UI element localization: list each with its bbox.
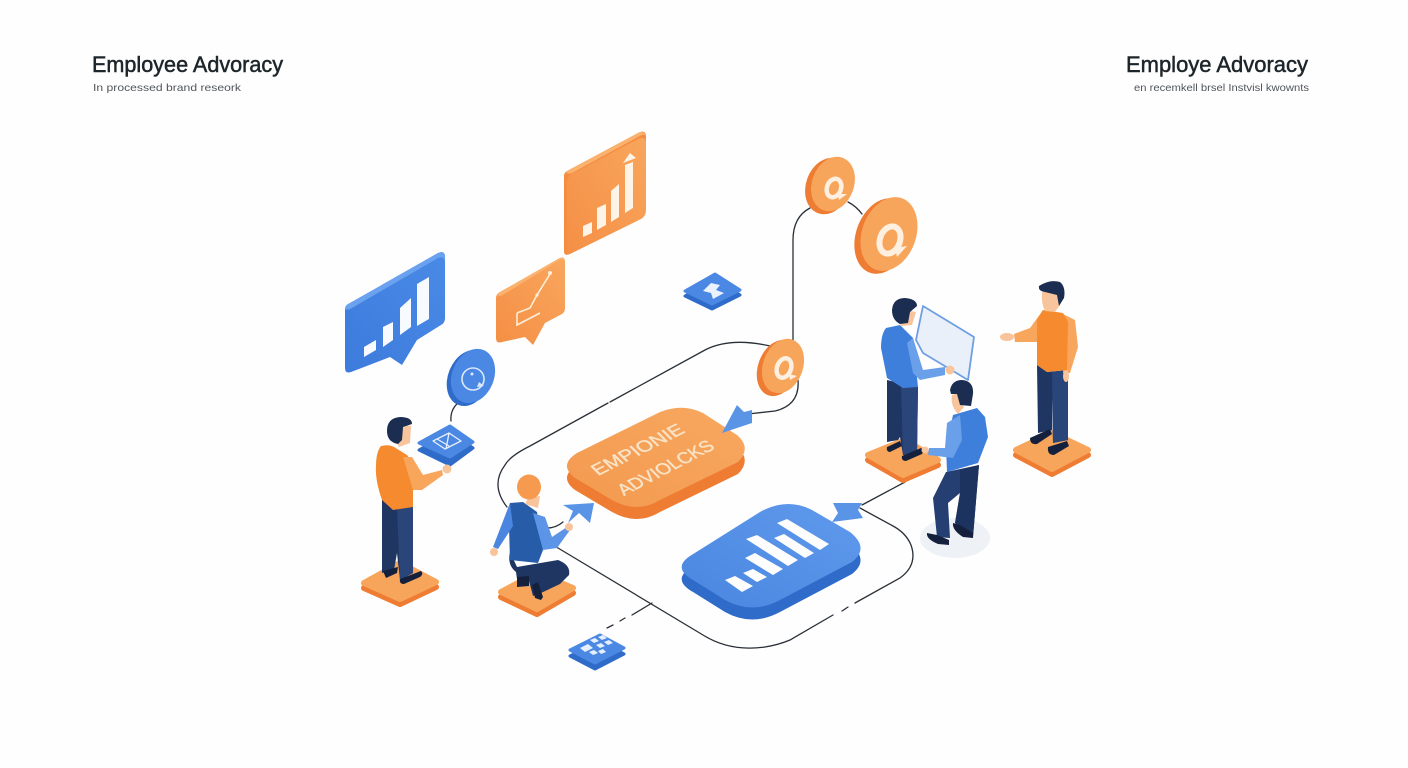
person: kneeling, blue xyxy=(490,474,573,600)
icon: orange chat circle 2 xyxy=(844,189,927,282)
icon: blue tile grid xyxy=(570,635,624,669)
arrow: from sitting person xyxy=(563,503,594,523)
title block: right: Employe Advoracy xyxy=(1126,52,1308,77)
platform: right figure xyxy=(1016,433,1088,474)
pants xyxy=(382,500,413,580)
pants xyxy=(887,380,918,455)
shirt xyxy=(1037,310,1068,372)
shirt xyxy=(946,408,988,472)
title block: left: Employee Advoracy xyxy=(92,52,283,77)
icon: blue circle badge xyxy=(439,342,503,413)
person: right standing, orange xyxy=(1000,281,1078,455)
head xyxy=(952,393,964,414)
slab label xyxy=(587,421,719,499)
panel: blue slab xyxy=(682,504,861,620)
person: left standing, orange xyxy=(376,417,452,584)
arm xyxy=(403,457,443,490)
title block: left: In processed brand reseork xyxy=(93,82,242,94)
icon: big orange chart card xyxy=(564,132,646,255)
shirt xyxy=(881,325,918,388)
platform: centre figure xyxy=(868,440,938,480)
icon: small orange chart bubble xyxy=(496,258,565,345)
platform: kneeling figure xyxy=(501,573,573,614)
icon: blue chart bubble xyxy=(345,252,445,372)
pants xyxy=(933,465,979,538)
title block: right: en recemkell brsel Instvisl kwownts xyxy=(1134,82,1309,94)
title block: left xyxy=(92,52,283,94)
head xyxy=(900,310,916,326)
shoes xyxy=(1030,429,1069,455)
arm xyxy=(928,415,962,458)
icon: blue tile share xyxy=(685,274,740,309)
person: walking, blue xyxy=(920,380,990,558)
arm xyxy=(907,338,945,380)
person: centre with tablet xyxy=(881,298,954,461)
bars on blue slab xyxy=(725,519,829,592)
icon: orange chat circle 1 xyxy=(797,151,862,221)
platform: left figure xyxy=(364,563,436,604)
shoes xyxy=(383,567,422,584)
arms xyxy=(493,503,513,549)
arrow: to orange slab top xyxy=(722,405,752,433)
shoes xyxy=(517,576,543,600)
shirt xyxy=(376,445,413,510)
shoes xyxy=(887,441,923,461)
arms xyxy=(1014,310,1043,342)
legs xyxy=(509,552,569,596)
slab label: EMPIONIE xyxy=(587,421,689,479)
head xyxy=(394,424,411,447)
pants xyxy=(1037,365,1068,443)
title block: right xyxy=(1126,52,1309,94)
panel: orange slab with label xyxy=(567,408,745,519)
tablet xyxy=(916,306,974,380)
icon: blue tile diagram xyxy=(419,426,473,465)
icon: orange chat circle 3 xyxy=(749,333,811,402)
arrow: to blue slab xyxy=(832,503,863,522)
slab label: ADVIOLCKS xyxy=(613,437,719,499)
shoes xyxy=(927,523,973,545)
vest xyxy=(509,502,543,563)
connector lines xyxy=(451,202,913,648)
head xyxy=(1042,292,1060,312)
head xyxy=(525,496,540,508)
